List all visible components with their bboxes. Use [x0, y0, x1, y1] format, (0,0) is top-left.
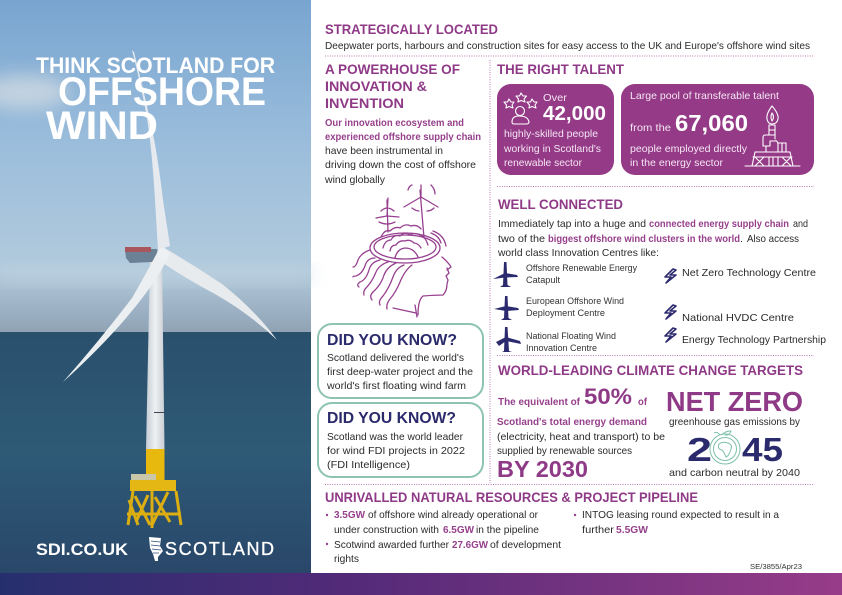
stat card: 42,000: working in Scotland's — [503, 143, 601, 155]
text: National Floating Wind Innovation Centre — [526, 331, 616, 353]
section: a powerhouse of innovation: wind globally — [324, 174, 386, 186]
stat card: 42,000: 42,000 — [543, 103, 606, 125]
section: natural resources and project pipeline: 27.6GW — [452, 539, 488, 551]
section: natural resources and project pipeline: Scotwind awarded further — [334, 539, 449, 551]
section: natural resources and project pipeline — [325, 489, 779, 565]
section: a powerhouse of innovation: INNOVATION & — [325, 78, 427, 94]
logo: Scotland thistle wordmark: SCOTLAND — [165, 539, 274, 559]
section: well connected: biggest offshore wind clusters in the world — [548, 233, 740, 245]
block: net zero 2045: 2 — [687, 431, 712, 468]
callout: did you know 2 — [318, 403, 483, 477]
icon: turbine, National Floating Wind Innovation Centre — [496, 327, 521, 352]
section: natural resources and project pipeline: UNRIVALLED NATURAL RESOURCES & PROJECT PIPELINE — [325, 489, 698, 505]
section: a powerhouse of innovation: experienced offshore supply chain — [325, 131, 481, 143]
icon: head with wind turbines — [353, 185, 451, 317]
block: 50% by 2030: (electricity, heat and transport) to be — [497, 431, 665, 443]
callout: did you know 2: for wind FDI projects in 2022 — [327, 445, 465, 457]
section: strategically located: STRATEGICALLY LOCATED — [325, 21, 498, 37]
block: 50% by 2030: 50% — [584, 384, 632, 409]
section: natural resources and project pipeline: 5.5GW — [616, 524, 648, 536]
icon: turbine, Offshore Renewable Energy Catapult — [493, 262, 518, 287]
text: National HVDC Centre: National HVDC Centre — [682, 312, 794, 324]
block: 50% by 2030: supplied by renewable sources — [497, 445, 632, 457]
stat card: 67,060: Large pool of transferable talent — [630, 90, 779, 102]
block: net zero 2045: greenhouse gas emissions by — [669, 416, 801, 428]
section: the right talent: THE RIGHT TALENT — [497, 61, 624, 77]
section: natural resources and project pipeline: rights — [334, 553, 359, 565]
section: well connected: Also access — [747, 233, 799, 245]
callout: did you know 1: Scotland delivered the world's — [327, 352, 464, 364]
title: WIND — [46, 104, 158, 148]
text: Offshore Renewable Energy Catapult — [526, 263, 637, 285]
section: well connected: WELL CONNECTED — [498, 196, 623, 212]
callout: did you know 1: DID YOU KNOW? — [327, 332, 457, 349]
text: European Offshore Wind Deployment Centre: Deployment Centre — [526, 308, 605, 318]
text: National Floating Wind Innovation Centre: National Floating Wind — [526, 331, 616, 341]
callout: did you know 2: DID YOU KNOW? — [327, 410, 456, 427]
callout: did you know 2: Scotland was the world leader — [327, 431, 463, 443]
panel: turbine photo — [0, 0, 311, 573]
icon: bolt 3 — [665, 328, 676, 342]
section: natural resources and project pipeline: 6.5GW — [443, 524, 474, 536]
stat card: 67,060 — [621, 84, 814, 175]
callout: did you know 2: (FDI Intelligence) — [327, 459, 410, 471]
section: natural resources and project pipeline: in the pipeline — [476, 524, 539, 536]
stat card: 42,000: Over — [543, 92, 568, 104]
section: well connected: connected energy supply chain — [649, 218, 789, 230]
section: a powerhouse of innovation: A POWERHOUSE OF — [325, 61, 460, 77]
section: natural resources and project pipeline: INTOG leasing round expected to result in a — [582, 509, 779, 521]
icon: bolt 2 — [665, 305, 676, 319]
icon: person with stars — [504, 93, 537, 124]
block: 50% by 2030: of — [638, 396, 647, 408]
section: well connected — [497, 196, 808, 259]
stat card: 42,000 — [497, 84, 614, 175]
block: 50% by 2030 — [497, 384, 665, 482]
icon: oil rig with flame — [745, 106, 800, 166]
callout: did you know 1 — [318, 324, 483, 398]
section: natural resources and project pipeline: 3.5GW — [334, 509, 365, 521]
section: well connected: and — [793, 218, 808, 230]
callout: did you know 1: first deep-water project and the — [327, 366, 473, 378]
section: well connected: world class Innovation Centres like: — [497, 247, 659, 259]
section: natural resources and project pipeline: further — [582, 524, 615, 536]
section: a powerhouse of innovation: have been instrumental in — [325, 145, 443, 157]
section: a powerhouse of innovation: driving down the cost of offshore — [325, 159, 476, 171]
document reference: SE/3855/Apr23 — [750, 562, 802, 571]
title — [36, 53, 275, 148]
stat card: 67,060: in the energy sector — [630, 157, 724, 169]
stat card: 67,060: people employed directly — [630, 143, 748, 155]
block: 50% by 2030: The equivalent of — [498, 396, 580, 408]
block: net zero 2045: 45 — [742, 431, 783, 468]
stat card: 42,000: renewable sector — [504, 157, 582, 169]
stat card: 67,060: 67,060 — [675, 110, 748, 136]
section: strategically located — [325, 21, 810, 52]
title: OFFSHORE — [58, 70, 266, 114]
callout: did you know 1: world's first floating wind farm — [326, 380, 466, 392]
section: a powerhouse of innovation — [324, 61, 481, 186]
block: net zero 2045: NET ZERO — [666, 386, 803, 417]
icon: turbine, European Offshore Wind Deployment Centre — [494, 296, 519, 320]
section: natural resources and project pipeline: under construction with — [334, 524, 439, 536]
section: natural resources and project pipeline: of development — [490, 539, 561, 551]
section: climate change targets heading: WORLD-LEADING CLIMATE CHANGE TARGETS — [498, 362, 803, 378]
stat card: 67,060: from the — [630, 122, 671, 134]
section: a powerhouse of innovation: INVENTION — [325, 95, 404, 111]
icon: globe with leaf — [710, 431, 740, 464]
section: well connected: two of the — [498, 233, 545, 245]
section: well connected: Immediately tap into a huge and — [498, 218, 646, 230]
text: European Offshore Wind Deployment Centre: European Offshore Wind — [526, 296, 624, 306]
bottom gradient band — [0, 573, 842, 595]
block: 50% by 2030: BY 2030 — [497, 456, 588, 482]
icon: offshore wind turbine — [63, 50, 277, 528]
section: natural resources and project pipeline: of offshore wind already operational or — [368, 509, 538, 521]
icon: bolt 1 — [665, 269, 676, 283]
section: a powerhouse of innovation: Our innovation ecosystem and — [325, 117, 464, 129]
block: 50% by 2030: Scotland's total energy demand — [497, 416, 647, 428]
text: National Floating Wind Innovation Centre: Innovation Centre — [526, 343, 597, 353]
stat card: 42,000: highly-skilled people — [504, 128, 598, 140]
text: Offshore Renewable Energy Catapult: Offshore Renewable Energy — [526, 263, 637, 273]
text: Net Zero Technology Centre: Net Zero Technology Centre — [682, 267, 816, 279]
text: Offshore Renewable Energy Catapult: Catapult — [526, 275, 560, 285]
website address: SDI.CO.UK — [36, 540, 129, 559]
section: strategically located: Deepwater ports, harbours and construction sites for easy access to the UK and Europe's offshore wind sites — [325, 40, 810, 52]
block: net zero 2045 — [666, 386, 803, 479]
text: Energy Technology Partnership: Energy Technology Partnership — [682, 334, 826, 346]
section: well connected: . — [740, 233, 743, 245]
block: net zero 2045: and carbon neutral by 2040 — [669, 467, 800, 479]
title: THINK SCOTLAND FOR — [36, 53, 275, 78]
text: European Offshore Wind Deployment Centre — [526, 296, 624, 318]
